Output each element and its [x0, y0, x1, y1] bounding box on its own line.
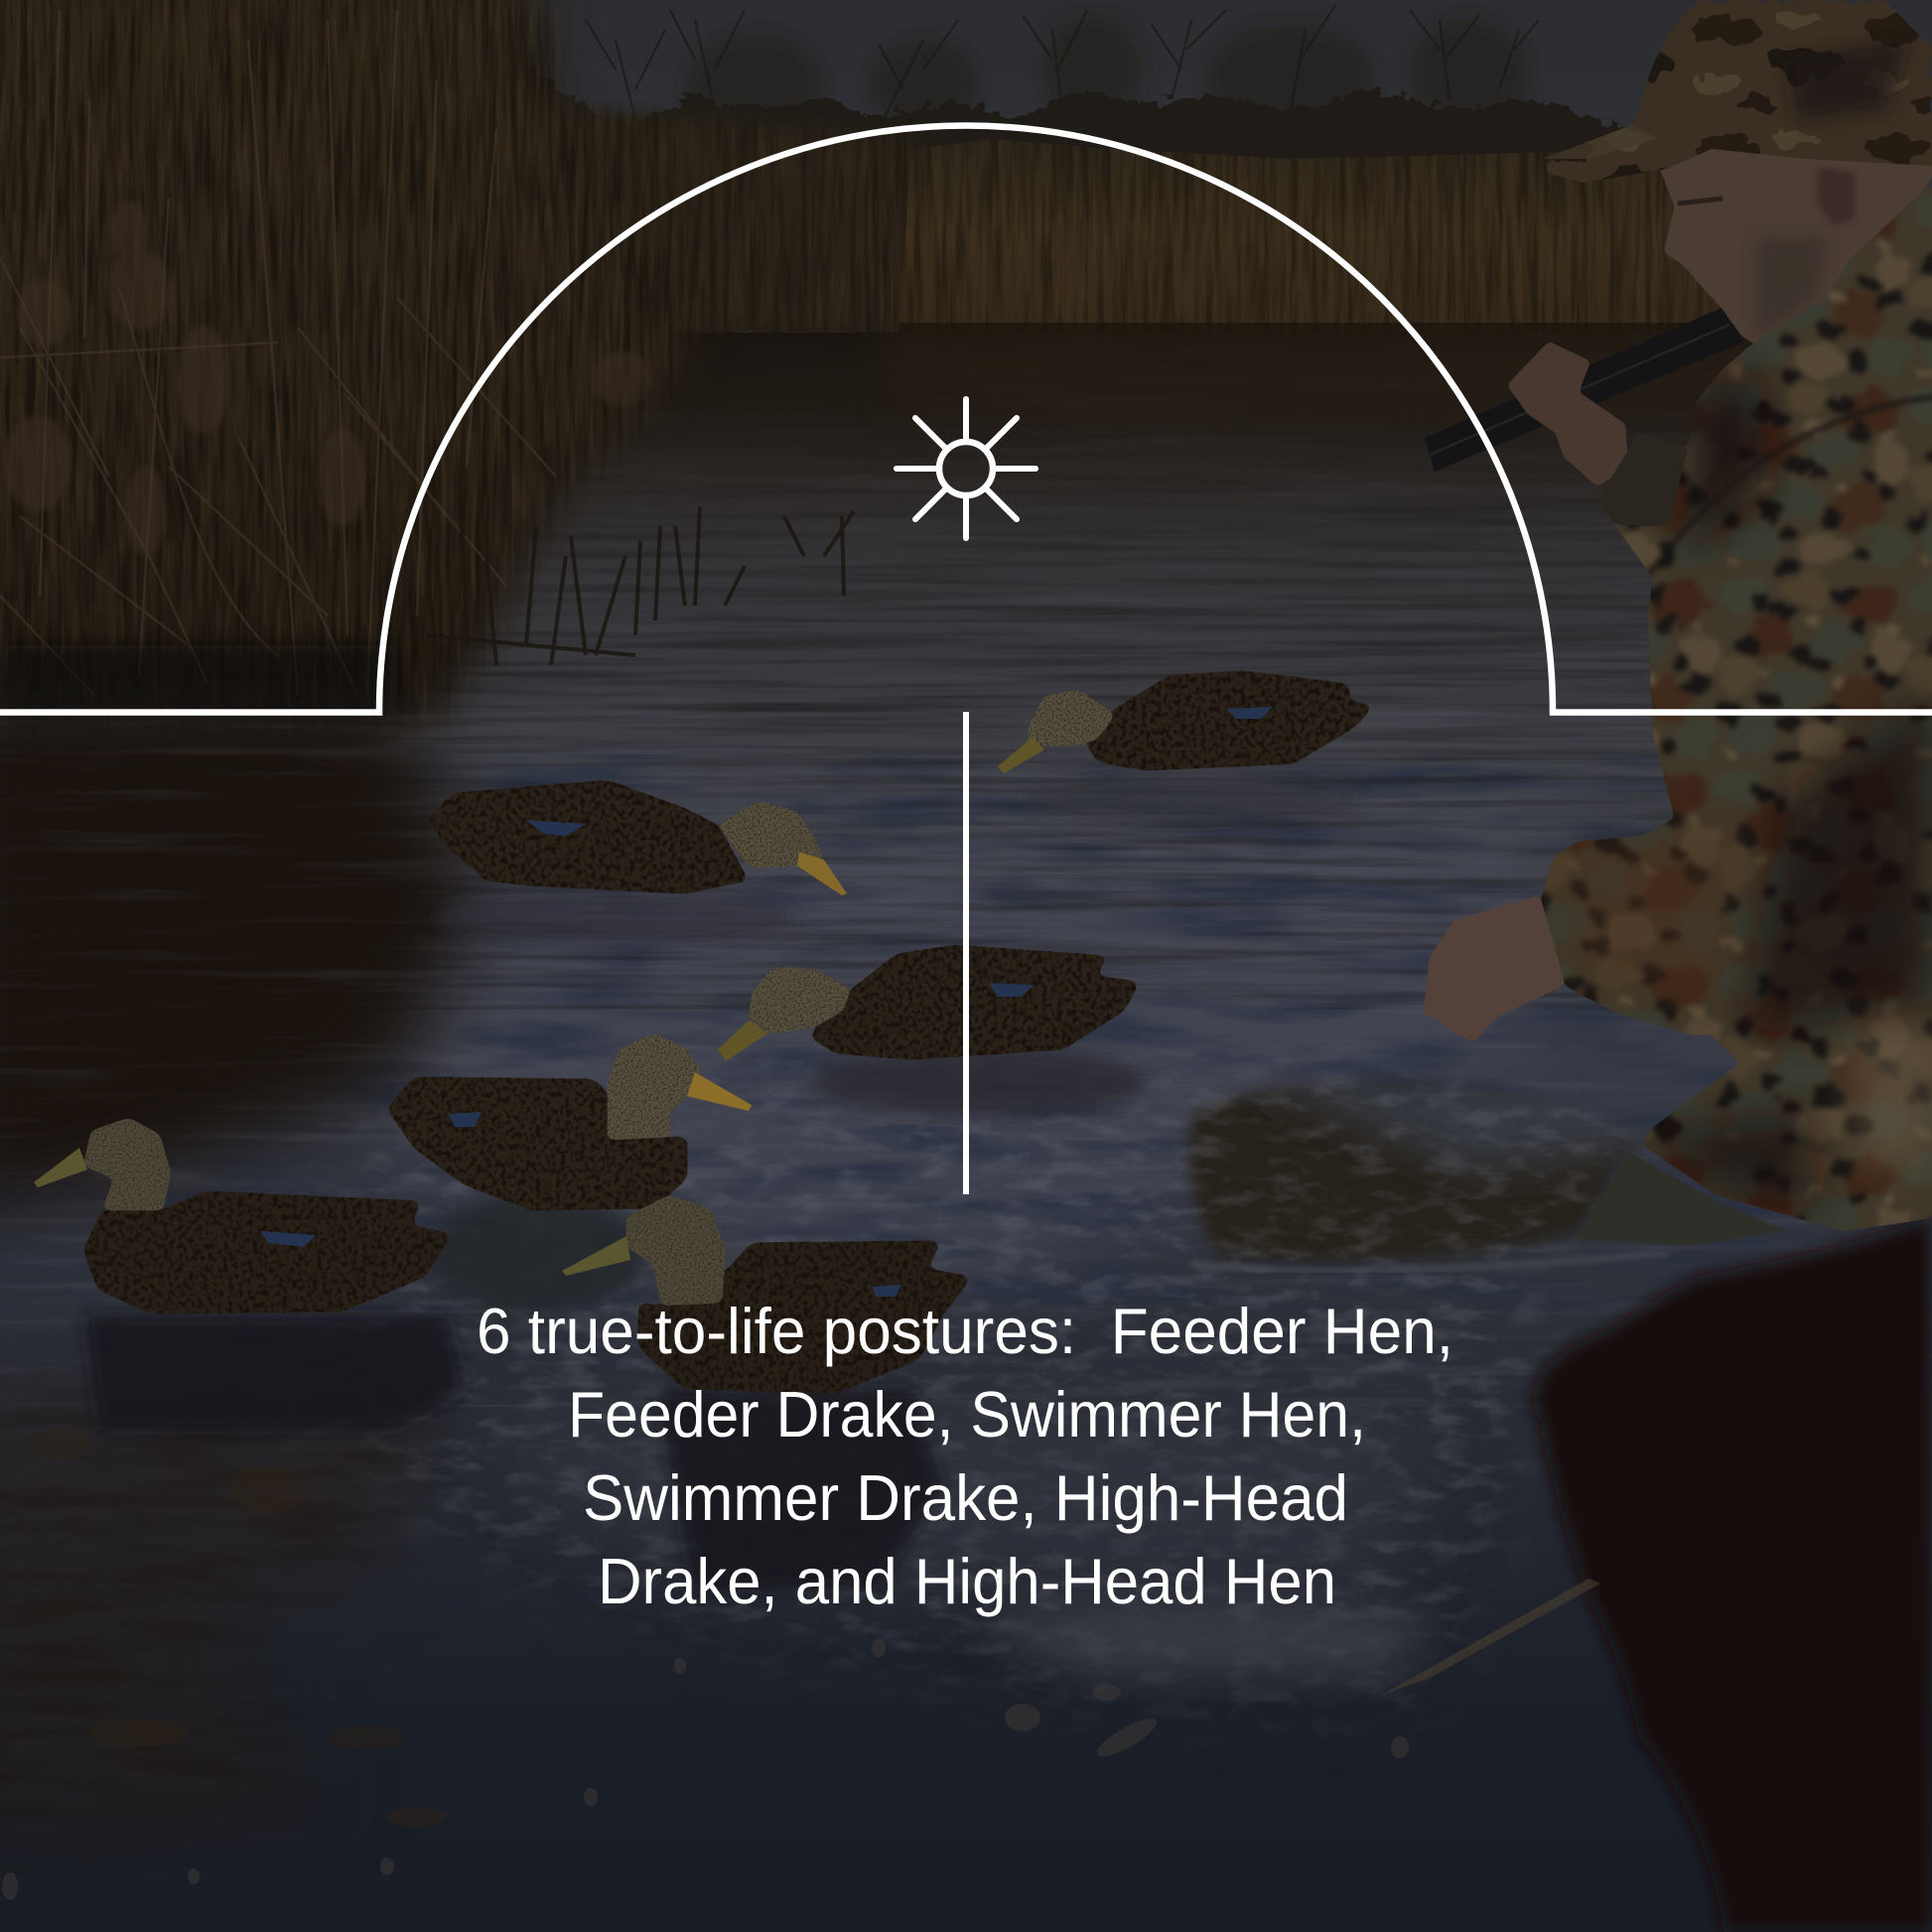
wader [1577, 1153, 1787, 1246]
duck: high-head drake [387, 1034, 752, 1210]
right brown reflection [1380, 1216, 1932, 1932]
semicircle frame line [0, 125, 1932, 712]
water reeds [427, 506, 854, 665]
caption text: Swimmer Drake, High-Head [583, 1461, 1348, 1534]
caption text [477, 1295, 1453, 1617]
duck: feeder upper right [998, 671, 1374, 773]
camouflage cap [1529, 0, 1932, 189]
left brown reflection [0, 707, 506, 1821]
caption text: Drake, and High-Head Hen [598, 1545, 1336, 1617]
brown water debris [30, 1429, 447, 1827]
caption text: Feeder Drake, Swimmer Hen, [568, 1378, 1366, 1450]
splash in water [1181, 1077, 1637, 1265]
vertical divider line [963, 712, 969, 1194]
upper hand [1507, 342, 1628, 486]
duck reflections [84, 771, 1360, 1588]
camouflage jacket [1519, 169, 1932, 1251]
background sky [0, 0, 1932, 338]
face and neck [1658, 149, 1932, 353]
sleeve cuff [1597, 433, 1688, 526]
shotgun barrels [1425, 308, 1744, 472]
mid bush behind arc [587, 103, 911, 333]
hunter [1424, 0, 1932, 1251]
distant tree line [437, 5, 1787, 338]
duck: feeder centre [718, 945, 1140, 1061]
lower rippled water [0, 715, 1932, 1735]
far reed bank [899, 139, 1736, 333]
caption text: 6 true-to-life postures: Feeder Hen, [477, 1295, 1453, 1367]
left reed bed [0, 0, 755, 735]
duck: high-head hen [34, 1118, 452, 1313]
lower hand [1424, 896, 1565, 1042]
floating leaves and debris [2, 1639, 1409, 1900]
icon: sun [897, 399, 1035, 538]
duck: feeder left [427, 780, 847, 896]
upper calm water [416, 333, 1753, 712]
duck: swimmer front [562, 1195, 972, 1393]
foam edge [1191, 1253, 1668, 1271]
